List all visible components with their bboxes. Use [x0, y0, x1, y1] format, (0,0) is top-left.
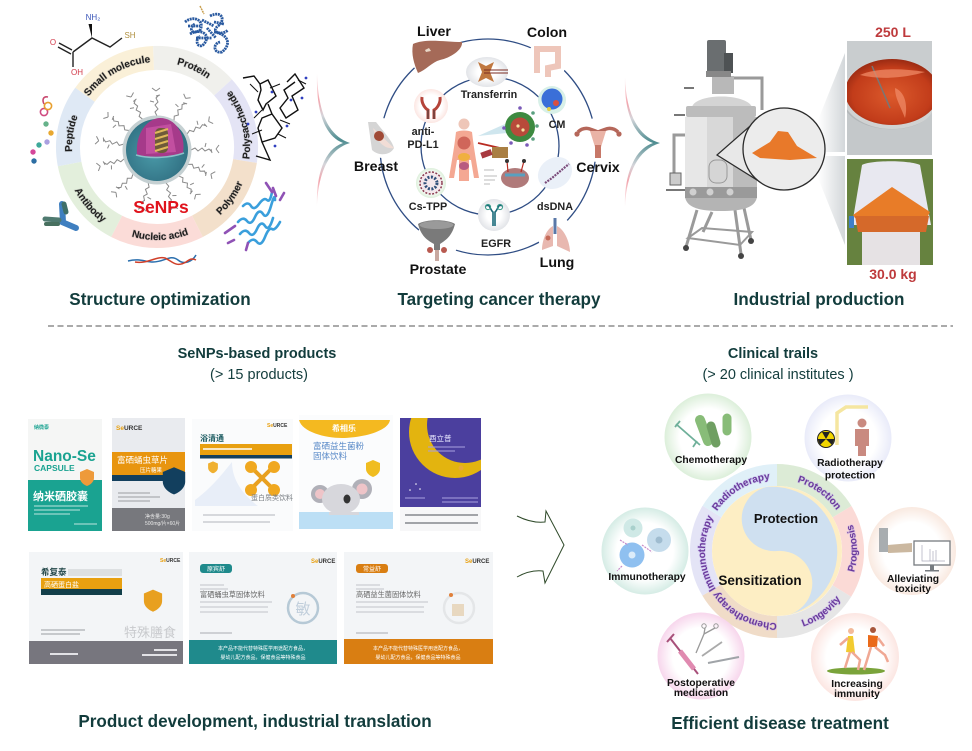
icon: dsDNA: [532, 150, 578, 196]
icon: small molecule structure: OH: [71, 68, 83, 77]
product: orange probiotic drink: 婴幼儿配方食品，保健食品等特殊食品: [375, 654, 461, 661]
bubble: Radiotherapy protection: protection: [825, 470, 875, 482]
label: Breast: Breast: [354, 159, 398, 175]
label: Peptide: Peptide: [64, 114, 78, 152]
product: probiotic powder with koala: [299, 415, 393, 529]
icon: polymer chains: [225, 183, 284, 250]
product: protein drink: 浴清通: [200, 433, 224, 443]
yin-yang: Protection and Sensitization: [712, 486, 842, 616]
bubble: Chemotherapy: [664, 394, 752, 480]
yin-yang: Protection and Sensitization: Sensitization: [718, 573, 802, 588]
product: selenium cordyceps tablets: [112, 418, 185, 531]
bubble: Radiotherapy protection: Radiotherapy: [817, 458, 883, 469]
icon: anti-PD-L1: [414, 89, 448, 123]
product: Nano-Se capsule: Nano-Se: [33, 448, 96, 465]
icon: antibody: [45, 204, 76, 228]
bubble: Immunotherapy: [602, 508, 688, 594]
product: orange probiotic drink: 本产品不能代替特殊医学用途配方食品，: [373, 645, 463, 652]
label: CM: CM: [549, 119, 565, 131]
product: selenium cordyceps tablets: 压片糖果: [140, 466, 163, 474]
icon: breast: [366, 118, 398, 158]
bubble: Alleviating toxicity: [868, 507, 956, 595]
label: 30.0 kg: 30.0 kg: [869, 266, 917, 282]
product: orange probiotic drink: 高硒益生菌固体饮料: [356, 590, 421, 599]
arrow: products to clinic: [517, 511, 564, 583]
bubble: Chemotherapy: Chemotherapy: [675, 455, 747, 466]
icon: transferrin: [466, 57, 508, 87]
title: Structure optimization: Structure optimization: [69, 290, 251, 309]
product: Nano-Se capsule: 纳米硒胶囊: [33, 489, 88, 503]
label: Small molecule: Small molecule: [84, 55, 150, 96]
icon: EGFR: [478, 199, 510, 231]
label: Radiotherapy: Radiotherapy: [711, 473, 770, 512]
arrow: chevron 1: [317, 73, 350, 207]
bubble: Postoperative medication: Postoperative: [667, 678, 735, 689]
label: Prognosis: Prognosis: [846, 524, 860, 572]
icon: colon: [527, 39, 567, 81]
product: selenium cordyceps tablets: SeURCE: [116, 425, 143, 432]
label: Prostate: Prostate: [410, 262, 466, 278]
label: 250 L: 250 L: [875, 24, 911, 40]
label: Nucleic acid: Nucleic acid: [132, 227, 189, 241]
icon: small molecule structure: [50, 13, 136, 77]
icon: peptide chain: [30, 97, 54, 164]
subheading: institute count: (> 20 clinical institutes ): [702, 367, 854, 383]
product: sleep drink with moon: 酉立普: [429, 433, 452, 443]
bubble: Increasing immunity: [811, 613, 899, 701]
product: special dietary protein: [29, 552, 183, 664]
panel: industrial production: [666, 24, 942, 282]
label: Cs-TPP: Cs-TPP: [409, 201, 447, 213]
panel: structure optimization: [30, 6, 308, 266]
product: special dietary protein: SeURCE: [160, 558, 181, 564]
icon: small molecule structure: NH₂: [86, 13, 100, 22]
label: Polysaccharide: Polysaccharide: [227, 90, 252, 160]
panel: targeting cancer therapy: [354, 24, 623, 278]
label: anti-PD-L1: anti-: [412, 126, 434, 138]
product: Nano-Se capsule: [28, 419, 102, 531]
icon: bladder prostate: [416, 219, 458, 263]
product: teal selenium cordyceps drink: 敏: [295, 601, 311, 618]
label: Antibody: Antibody: [74, 188, 107, 223]
icon: protein: [185, 6, 228, 52]
label: Colon: Colon: [527, 25, 567, 41]
bubble: Postoperative medication: medication: [674, 688, 728, 699]
icon: CM cell: [538, 86, 566, 114]
label: Immunotherapy: Immunotherapy: [697, 514, 716, 593]
callout: lens with powder: [717, 108, 825, 190]
product: Nano-Se capsule: 纳微泰: [34, 424, 49, 431]
ring: ligand classes: [68, 58, 246, 236]
product: teal selenium cordyceps drink: 本产品不能代替特殊医学用途配方食品，: [218, 645, 308, 652]
icon: Cs-TPP: [416, 168, 446, 198]
icon: lung: [538, 216, 574, 256]
bubble: Increasing immunity: Increasing: [831, 679, 883, 690]
label: EGFR: EGFR: [481, 238, 511, 250]
product: probiotic powder with koala: 富硒益生菌粉: [313, 441, 365, 451]
product: protein drink: 蛋白质类饮料: [251, 493, 293, 502]
product: sleep drink with moon: [400, 418, 481, 524]
product: orange probiotic drink: 常益舒: [363, 565, 381, 573]
orbit circles: [380, 39, 596, 255]
label: Polymer: Polymer: [215, 180, 242, 216]
heading: Clinical trails: Clinical trails: [728, 346, 818, 362]
label: Cervix: Cervix: [576, 160, 620, 176]
product: teal selenium cordyceps drink: SeURCE: [311, 559, 335, 565]
product: special dietary protein: 特殊膳食: [124, 625, 176, 640]
product: probiotic powder with koala: 固体饮料: [313, 451, 348, 461]
product: Nano-Se capsule: CAPSULE: [34, 463, 75, 473]
label: Lung: Lung: [540, 255, 574, 271]
product: orange probiotic drink: SeURCE: [465, 559, 489, 565]
label: Protection: Protection: [797, 474, 840, 510]
product: probiotic powder with koala: 希相乐: [332, 423, 356, 433]
ring: outcome segments: [701, 475, 853, 627]
cone: zoom from lens to photos: [818, 53, 845, 245]
title: Product development, industrial translation: Product development, industrial translation: [78, 712, 432, 731]
title: Efficient disease treatment: Efficient disease treatment: [671, 714, 889, 733]
bubble: Increasing immunity: immunity: [834, 689, 880, 700]
subheading: product count: (> 15 products): [210, 367, 308, 383]
product: teal selenium cordyceps drink: [189, 552, 337, 664]
icon: reactor: [666, 40, 762, 259]
bubble: Immunotherapy: Immunotherapy: [608, 572, 686, 583]
bubble: Alleviating toxicity: Alleviating: [887, 574, 939, 585]
product: protein drink: [192, 419, 293, 531]
product: selenium cordyceps tablets: 净含量:30g: [145, 513, 170, 520]
label: dsDNA: dsDNA: [537, 201, 573, 213]
bubble: Postoperative medication: [658, 612, 744, 700]
product: teal selenium cordyceps drink: 原宾舒: [207, 565, 225, 573]
bubble: Radiotherapy protection: [804, 394, 892, 482]
label: Liver: Liver: [417, 24, 451, 40]
label: SeNPs: SeNPs: [133, 197, 189, 217]
label: Transferrin: Transferrin: [461, 89, 517, 101]
product: selenium cordyceps tablets: 富硒蛹虫草片: [117, 455, 168, 465]
product: selenium cordyceps tablets: 500mg/片×60片: [145, 520, 180, 527]
title: Targeting cancer therapy: Targeting cancer therapy: [398, 290, 601, 309]
photo: worker holding tray: [847, 159, 933, 265]
label: Longevity: Longevity: [800, 595, 841, 627]
title: Industrial production: Industrial production: [734, 290, 904, 309]
yin-yang: Protection and Sensitization: Protection: [754, 511, 818, 526]
label: anti-PD-L1: PD-L1: [407, 139, 439, 151]
bubble: Alleviating toxicity: toxicity: [895, 584, 931, 595]
icon: small molecule structure: O: [50, 38, 56, 47]
icon: small molecule structure: SH: [124, 31, 136, 40]
icon: nanoparticle sphere: [95, 88, 219, 212]
product: special dietary protein: 希复泰: [41, 567, 67, 577]
label: Chemotherapy: Chemotherapy: [712, 592, 777, 630]
icon: uterus: [573, 118, 623, 162]
panel: product boxes: [28, 386, 503, 664]
icon: DNA helix: [128, 255, 196, 264]
product: protein drink: SeURCE: [267, 423, 288, 429]
illustration: human body and targeting: [449, 106, 539, 188]
icon: polysaccharide structure: [243, 74, 307, 160]
product: orange probiotic drink: [344, 552, 493, 664]
product: teal selenium cordyceps drink: 婴幼儿配方食品，保健食品等特殊食品: [220, 654, 306, 661]
heading: SeNPs-based products: SeNPs-based products: [178, 346, 336, 362]
arrow: chevron 2: [625, 77, 660, 207]
label: Protein: Protein: [176, 57, 210, 80]
photo: reactor vat: [847, 41, 932, 155]
panel: disease treatment wheel: [602, 394, 956, 701]
product: special dietary protein: 高硒蛋白盐: [44, 580, 79, 589]
icon: liver: [409, 36, 465, 76]
product: teal selenium cordyceps drink: 富硒蛹虫草固体饮料: [200, 590, 265, 599]
